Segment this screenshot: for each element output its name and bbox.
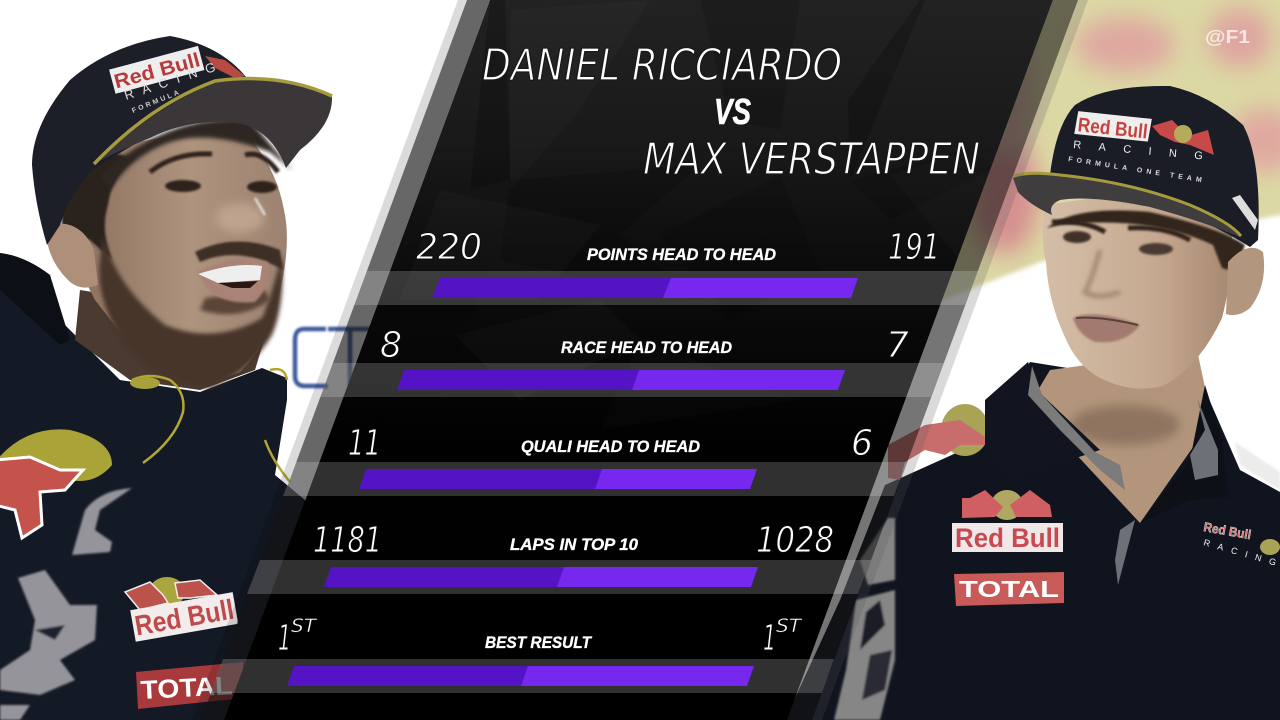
value: Verstappen: 6 bbox=[851, 423, 873, 464]
title: VS: VS bbox=[714, 91, 751, 132]
value: Ricciardo: 8 bbox=[380, 325, 402, 366]
cap logo: FORMULA bbox=[131, 90, 180, 115]
cap logo: RACING bbox=[1073, 139, 1203, 162]
value: Verstappen bbox=[763, 615, 802, 659]
cap logo: FORMULA ONE TEAM bbox=[1068, 156, 1202, 184]
Ricciardo cap bbox=[32, 36, 332, 245]
value: Verstappen: 1 bbox=[763, 618, 776, 659]
value: Ricciardo: ST bbox=[291, 615, 317, 637]
nose bbox=[216, 203, 264, 233]
value: Verstappen: 191 bbox=[888, 227, 940, 268]
bar: Ricciardo share bbox=[287, 666, 528, 686]
shoulder bull logo bbox=[888, 404, 989, 480]
diagonal band: left grey bbox=[201, 0, 490, 720]
right chest logo: Red Bull bbox=[1202, 519, 1252, 542]
label: QUALI HEAD TO HEAD bbox=[521, 437, 700, 456]
row track bbox=[247, 560, 871, 594]
value: Verstappen: 1028 bbox=[756, 520, 834, 561]
bar: Verstappen share bbox=[521, 666, 754, 686]
jacket drawcord bbox=[132, 369, 290, 482]
blurred sponsor letters behind the left driver bbox=[295, 329, 372, 386]
row track bbox=[354, 271, 978, 305]
row track bbox=[283, 462, 907, 496]
bar: Ricciardo share bbox=[359, 469, 602, 489]
beard bbox=[99, 235, 283, 388]
diagonal band: right grey bbox=[787, 0, 1078, 720]
row: race head to head bbox=[320, 325, 944, 397]
polo collar bbox=[985, 362, 1228, 585]
central dark panel bbox=[224, 0, 1053, 720]
jacket logo TOTAL bbox=[136, 662, 243, 709]
jacket logo bull bbox=[125, 577, 217, 610]
bar: Verstappen share bbox=[632, 370, 845, 390]
diagonal band: left outer light bbox=[192, 0, 467, 720]
chest logo Red Bull emblem bbox=[0, 429, 112, 538]
value: Ricciardo bbox=[278, 615, 317, 659]
value: Ricciardo: 220 bbox=[416, 227, 482, 268]
Verstappen neck bbox=[1032, 350, 1212, 523]
row track bbox=[320, 363, 944, 397]
row: quali head to head bbox=[283, 423, 907, 496]
shoulder trim bbox=[1235, 442, 1280, 490]
eyes and brows bbox=[1052, 222, 1190, 240]
ear bbox=[47, 224, 98, 288]
value: Ricciardo: 1 bbox=[278, 618, 291, 659]
hair bbox=[62, 150, 135, 260]
Verstappen shirt bbox=[785, 362, 1280, 720]
chest logo TOTAL bbox=[954, 572, 1064, 606]
sleeve camo print bbox=[834, 518, 895, 720]
row: best result bbox=[211, 615, 834, 693]
bar: Ricciardo share bbox=[324, 567, 564, 587]
value: Verstappen: ST bbox=[776, 615, 802, 637]
bar: Ricciardo share bbox=[397, 370, 639, 390]
Ricciardo head and face bbox=[47, 119, 292, 388]
label: LAPS IN TOP 10 bbox=[510, 535, 639, 554]
value: Verstappen: 7 bbox=[886, 325, 909, 366]
photo: Max Verstappen bbox=[785, 0, 1280, 720]
mouth bbox=[1073, 314, 1140, 342]
brows bbox=[150, 154, 278, 172]
bar: Verstappen share bbox=[663, 278, 858, 298]
value: Ricciardo: 11 bbox=[348, 423, 381, 464]
label: BEST RESULT bbox=[485, 633, 592, 652]
ear bbox=[1226, 248, 1264, 315]
nose shadow bbox=[1085, 250, 1120, 296]
cap logo bbox=[109, 46, 245, 115]
Ricciardo jacket bbox=[0, 253, 310, 720]
label: RACE HEAD TO HEAD bbox=[561, 338, 732, 357]
right chest logo bbox=[1202, 519, 1280, 568]
Verstappen cap bbox=[1013, 86, 1259, 247]
watermark: @F1: @F1 bbox=[1205, 27, 1250, 47]
jacket camo print bbox=[0, 488, 132, 720]
eyes bbox=[165, 180, 201, 192]
jacket logo Red Bull: Red Bull bbox=[132, 594, 236, 641]
chest logo TOTAL: TOTAL bbox=[959, 576, 1059, 602]
bar: Verstappen share bbox=[557, 567, 758, 587]
row track bbox=[211, 659, 834, 693]
row: laps in top 10 bbox=[247, 520, 871, 594]
cap logo: RACING bbox=[122, 59, 217, 103]
mouth bbox=[197, 259, 269, 302]
cap logo bbox=[1068, 111, 1258, 230]
value: Ricciardo: 1181 bbox=[313, 520, 382, 561]
row: points head to head bbox=[354, 227, 978, 305]
Verstappen head and face bbox=[1043, 190, 1264, 389]
hair bbox=[1047, 210, 1245, 272]
bar: Verstappen share bbox=[595, 469, 757, 489]
photo backdrop: blurred track signage bbox=[930, 0, 1280, 305]
Ricciardo neck bbox=[75, 290, 270, 390]
cap logo: Red Bull bbox=[112, 49, 202, 93]
hat shadow across forehead bbox=[100, 119, 292, 190]
cap logo: Red Bull bbox=[1077, 114, 1149, 143]
title: Max Verstappen: MAX VERSTAPPEN bbox=[643, 134, 980, 185]
jacket logo TOTAL: TOTAL bbox=[140, 670, 233, 705]
diagonal band: right outer light bbox=[812, 0, 1088, 720]
chest logo bull bbox=[962, 490, 1052, 520]
title: Daniel Ricciardo: DANIEL RICCIARDO bbox=[482, 40, 842, 91]
bar: Ricciardo share bbox=[432, 278, 671, 298]
photo: Daniel Ricciardo bbox=[0, 36, 332, 720]
label: POINTS HEAD TO HEAD bbox=[587, 245, 776, 264]
chest logo Red Bull: Red Bull bbox=[955, 523, 1060, 553]
right chest logo: RACING bbox=[1202, 537, 1277, 568]
